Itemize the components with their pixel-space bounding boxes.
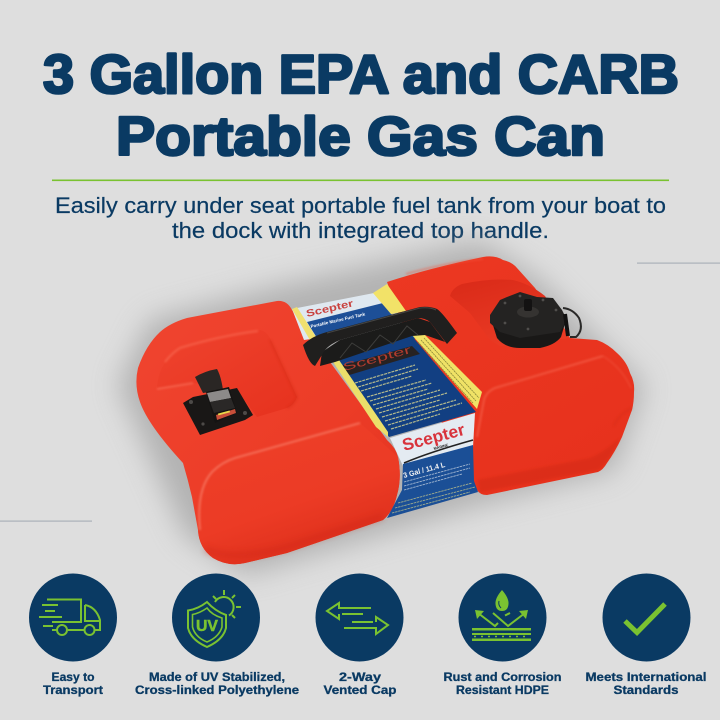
carry handle xyxy=(303,307,457,366)
circle xyxy=(316,574,404,662)
top white panel xyxy=(292,293,391,340)
product photo: fuel tank xyxy=(118,240,645,575)
label wrap: Scepter xyxy=(342,344,413,374)
feature: rust and corrosion resistant xyxy=(444,574,562,697)
drop shadow xyxy=(118,240,645,575)
title: 3 Gallon EPA and CARB xyxy=(43,43,679,105)
circle xyxy=(172,574,260,662)
icon: check mark xyxy=(625,604,665,632)
feature: UV stabilized: UV xyxy=(196,618,219,635)
label: Easy to xyxy=(52,670,94,684)
lattice xyxy=(320,318,445,366)
feature: easy to transport xyxy=(29,574,117,697)
label: Transport xyxy=(43,683,103,697)
front face xyxy=(198,423,400,564)
subtitle: the dock with integrated top handle. xyxy=(172,218,549,243)
label: Resistant HDPE xyxy=(456,683,549,697)
front blue panel xyxy=(333,336,476,437)
circle xyxy=(602,574,690,662)
circle xyxy=(458,574,546,662)
yellow side strips xyxy=(412,333,482,409)
icon: drop and layers xyxy=(472,590,531,641)
feature: international standards xyxy=(586,574,706,697)
label: Vented Cap xyxy=(324,683,396,697)
title xyxy=(43,43,679,167)
label wrap: MARINE xyxy=(433,443,449,451)
lower white panel xyxy=(390,413,475,466)
recess xyxy=(157,330,297,417)
icon: two way arrows xyxy=(327,603,388,634)
fuel cap xyxy=(490,292,581,348)
top blue panel xyxy=(307,303,392,338)
label wrap xyxy=(292,284,482,518)
back band between handle xyxy=(334,328,430,362)
recess xyxy=(450,280,570,346)
dark band on front panel xyxy=(340,346,420,376)
circle xyxy=(29,574,117,662)
icon: truck xyxy=(39,600,100,635)
label: Standards xyxy=(614,683,679,697)
label: Rust and Corrosion xyxy=(444,670,562,684)
feature: UV stabilized xyxy=(135,574,299,697)
right tank block xyxy=(387,256,634,495)
top yellow band xyxy=(373,284,406,314)
vent knob xyxy=(517,306,539,318)
accent line right xyxy=(637,262,720,264)
brand top: Scepter xyxy=(305,298,355,320)
lower blue panel xyxy=(387,445,478,518)
subtitle xyxy=(55,193,666,243)
subtitle: Easily carry under seat portable fuel tank from your boat to xyxy=(55,193,666,218)
icon: UV shield and sun xyxy=(188,590,241,647)
front highlight xyxy=(477,356,603,437)
green divider xyxy=(52,180,669,181)
label: Meets International xyxy=(586,670,706,684)
cap holes xyxy=(504,295,557,330)
label: 2-Way xyxy=(339,670,381,684)
label wrap: 3 Gal / 11.4 L xyxy=(402,460,446,480)
label wrap: Portable Marine Fuel Tank xyxy=(310,311,366,329)
front panel text lines xyxy=(355,365,462,429)
tank vent xyxy=(183,369,253,435)
accent line left xyxy=(0,520,92,522)
label: Cross-linked Polyethylene xyxy=(135,683,299,697)
tether xyxy=(563,308,581,337)
title: Portable Gas Can xyxy=(116,105,605,167)
feature: 2-way vented cap xyxy=(316,574,404,697)
left tank block xyxy=(136,301,400,564)
Scepter logo: Scepter xyxy=(400,420,467,455)
label: Made of UV Stabilized, xyxy=(149,670,285,684)
